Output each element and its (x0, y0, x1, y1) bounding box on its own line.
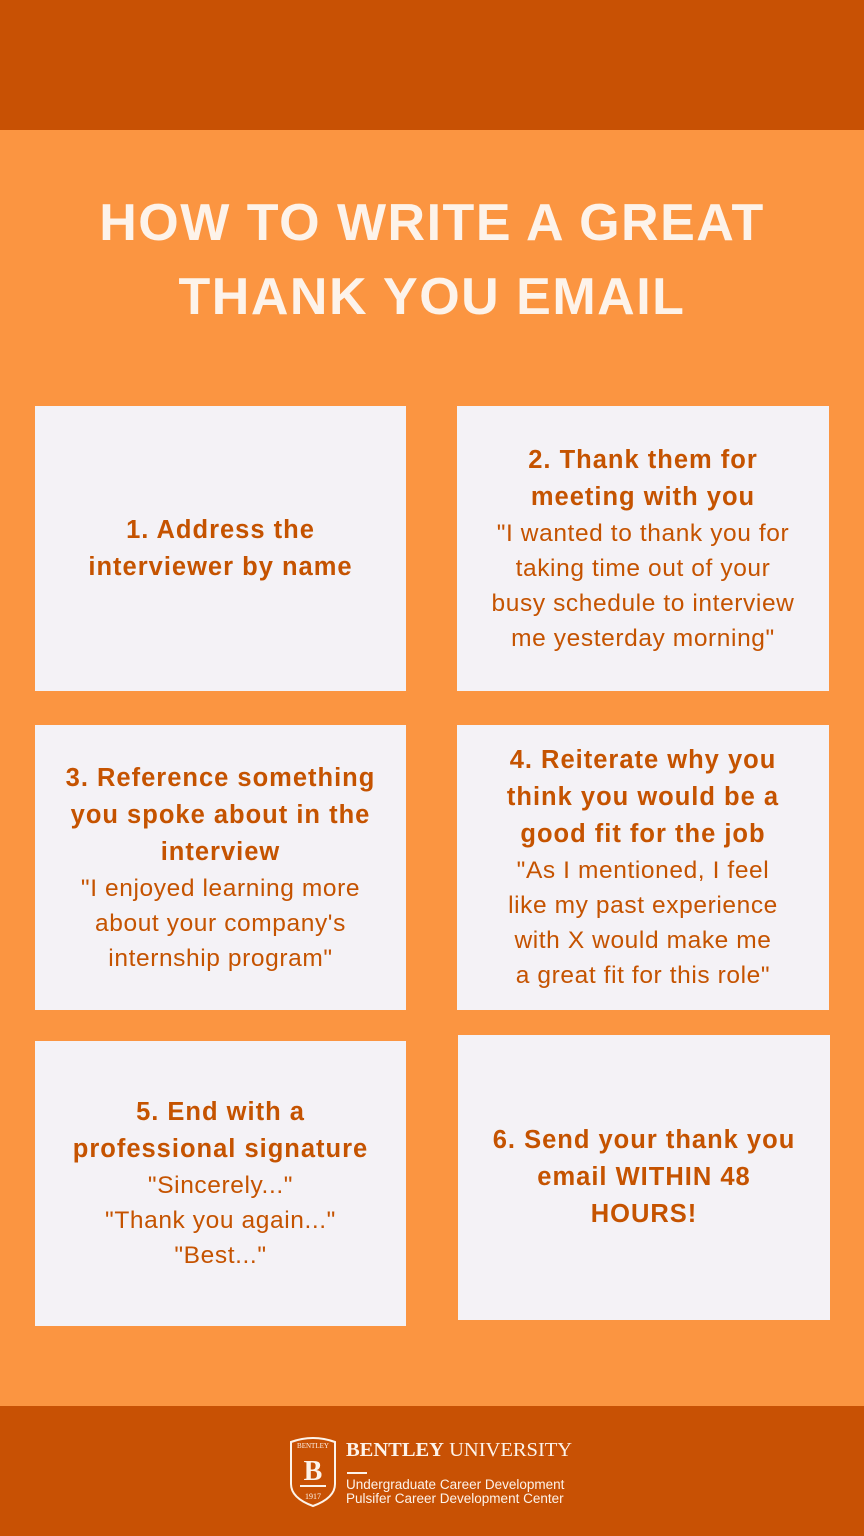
card 3: you spoke about in the (71, 800, 370, 828)
title (99, 194, 765, 326)
card 4: good fit for the job (520, 820, 766, 848)
card 4 (457, 725, 829, 1010)
card 5: "Thank you again..." (105, 1207, 336, 1234)
title: HOW TO WRITE A GREAT (99, 194, 765, 252)
card 5: professional signature (73, 1135, 368, 1163)
card 4: like my past experience (508, 892, 778, 919)
card 2: taking time out of your (516, 554, 770, 582)
card 3: about your company's (95, 910, 346, 936)
logo: shield: 1917 (305, 1492, 321, 1501)
logo: shield: B (304, 1456, 322, 1487)
card 2: "I wanted to thank you for (497, 520, 789, 546)
logo: shield: BENTLEY (297, 1442, 329, 1450)
card 4: think you would be a (507, 783, 779, 811)
card 5: "Sincerely..." (148, 1172, 293, 1199)
card 2: meeting with you (531, 482, 755, 510)
card 3: interview (161, 838, 280, 866)
card 5 (35, 1041, 406, 1326)
logo: subtitle (346, 1477, 564, 1506)
footer (0, 1406, 864, 1536)
card 1: interviewer by name (88, 552, 353, 580)
card 5: "Best..." (174, 1242, 267, 1269)
card 2: 2. Thank them for (528, 446, 758, 474)
logo: subtitle: Pulsifer Career Development Center (346, 1491, 564, 1506)
card 3: "I enjoyed learning more (81, 874, 360, 902)
card 6 (458, 1035, 830, 1320)
card 6: HOURS! (591, 1200, 697, 1228)
card 2 (457, 406, 829, 691)
card 5: 5. End with a (136, 1098, 305, 1126)
card 2: busy schedule to interview (492, 590, 794, 616)
card 4: 4. Reiterate why you (510, 746, 776, 774)
logo: shield (290, 1437, 336, 1508)
card 4: "As I mentioned, I feel (517, 857, 769, 884)
logo: wordmark: BENTLEY UNIVERSITY (346, 1439, 572, 1461)
card 3: internship program" (108, 944, 333, 972)
card 6: email WITHIN 48 (537, 1163, 751, 1191)
card 1 (35, 406, 406, 691)
card 3 (35, 725, 406, 1010)
card 4: with X would make me (514, 927, 772, 954)
logo: subtitle: Undergraduate Career Development (346, 1477, 564, 1492)
top band (0, 0, 864, 130)
card 4: a great fit for this role" (516, 962, 770, 989)
title: THANK YOU EMAIL (179, 268, 685, 326)
card 2: me yesterday morning" (511, 624, 775, 652)
card 1: 1. Address the (126, 516, 315, 544)
card 6: 6. Send your thank you (493, 1126, 795, 1154)
card 3: 3. Reference something (66, 764, 375, 792)
